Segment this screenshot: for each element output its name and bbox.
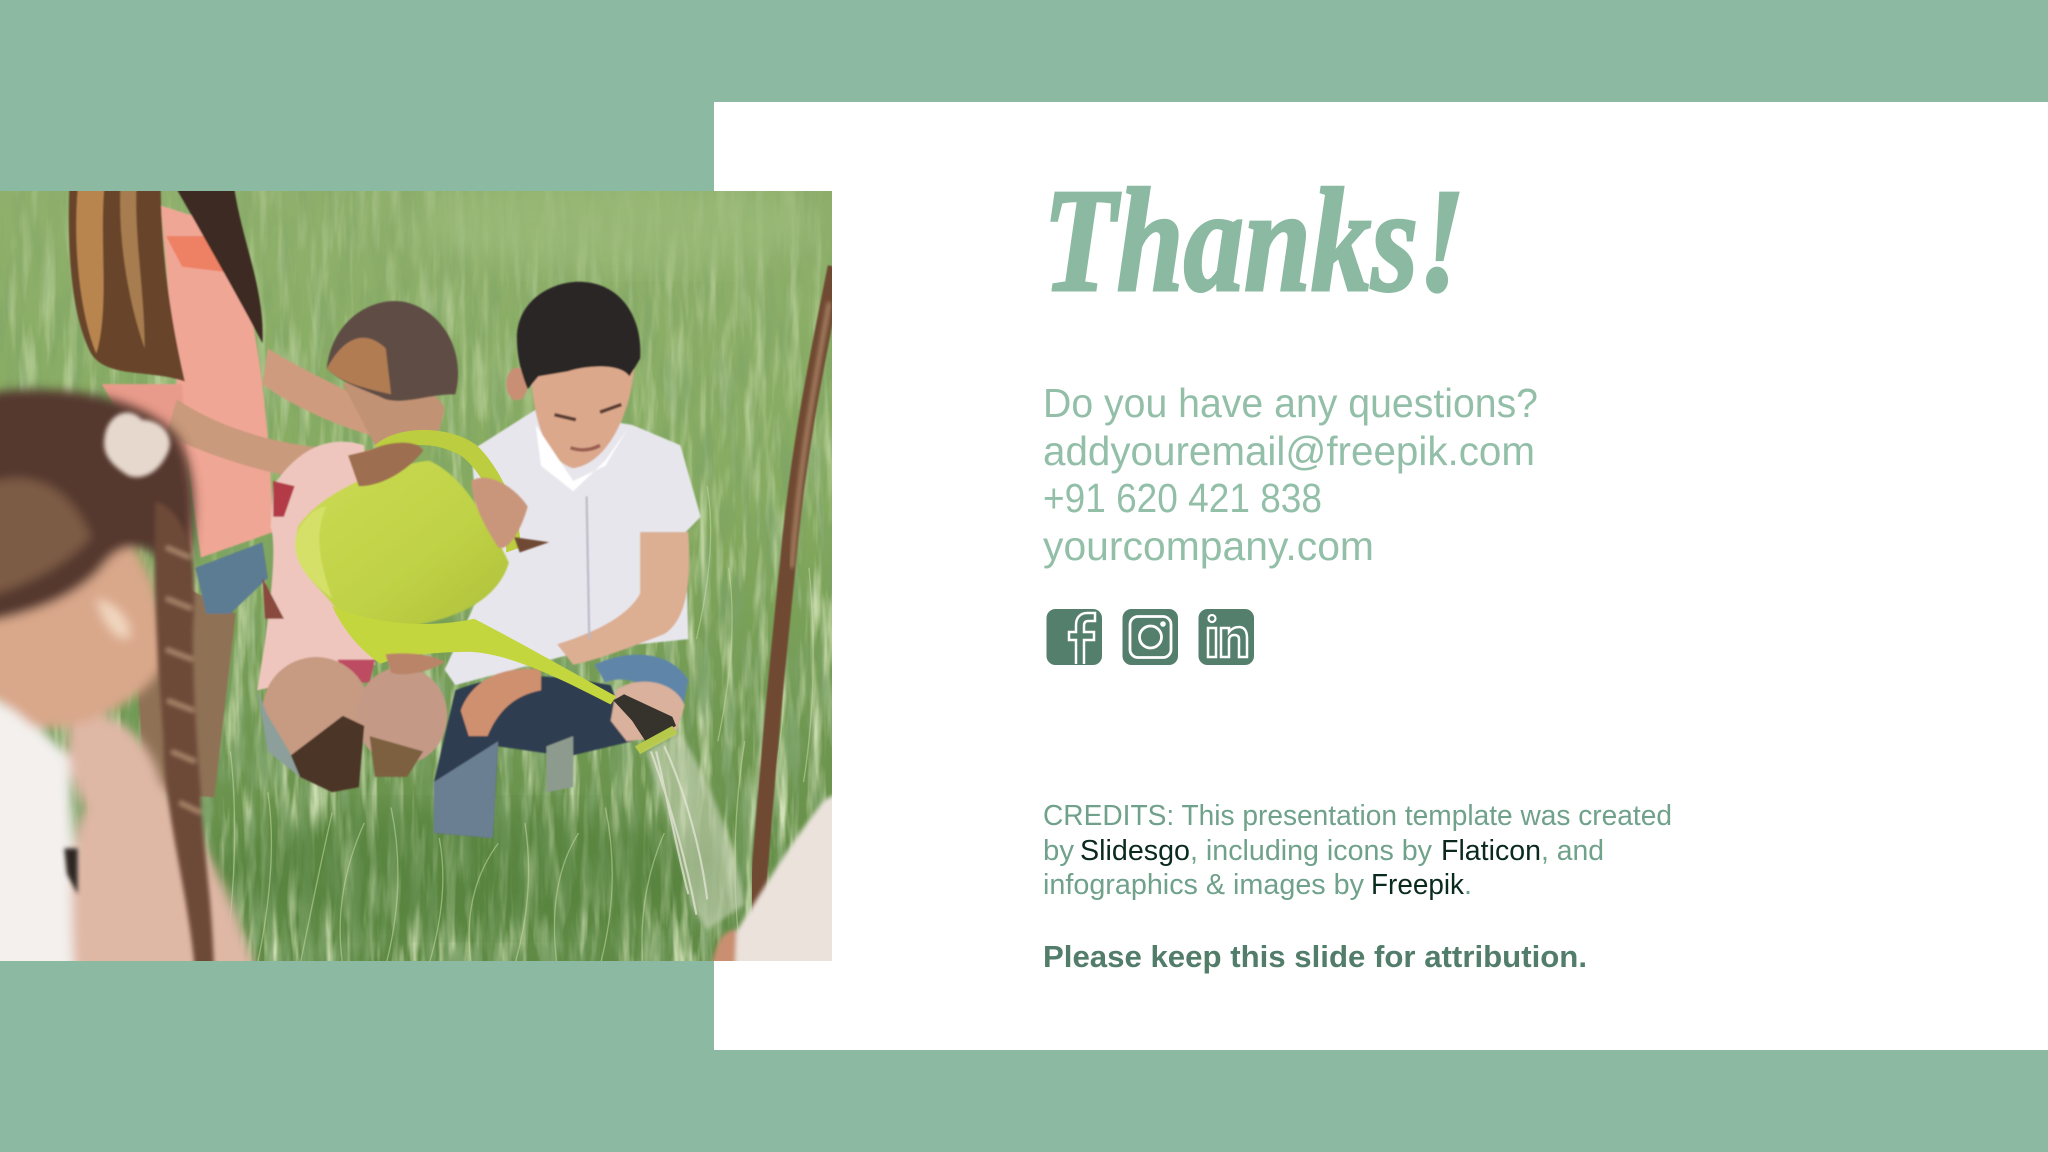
- middle child: [257, 301, 458, 792]
- pole: [756, 267, 836, 915]
- credits text: infographics & images by: [1043, 869, 1364, 901]
- credits text: CREDITS: This presentation template was created: [1043, 800, 1672, 832]
- credits text: .: [1464, 869, 1472, 901]
- credits text: Slidesgo: [1080, 835, 1190, 867]
- icon: linkedin: [1198, 609, 1254, 665]
- boy: [434, 282, 701, 838]
- hands on can: [348, 443, 549, 674]
- title: Thanks!: [1043, 159, 1465, 323]
- panel: white content card: [714, 102, 2048, 1050]
- water stream: [646, 734, 745, 930]
- credits text: by: [1043, 835, 1074, 867]
- contact details: yourcompany.com: [1043, 523, 1374, 569]
- contact details: Do you have any questions?: [1043, 380, 1538, 426]
- credits text: Flaticon: [1441, 835, 1541, 867]
- contact details: [1043, 380, 1538, 569]
- contact details: +91 620 421 838: [1043, 475, 1322, 521]
- credits text: , and: [1541, 835, 1604, 867]
- credits text: , including icons by: [1190, 835, 1432, 867]
- attribution note: Please keep this slide for attribution.: [1043, 939, 1587, 974]
- icon: facebook: [1046, 609, 1102, 665]
- foreground girl: [0, 390, 262, 996]
- icon: instagram: [1122, 609, 1178, 665]
- watering can: [295, 430, 678, 754]
- credits text: [1043, 800, 1672, 901]
- standing girl: [68, 191, 371, 798]
- credits text: Freepik: [1371, 869, 1464, 901]
- photo: children watering plant on grass: [0, 191, 832, 961]
- contact details: addyouremail@freepik.com: [1043, 428, 1535, 474]
